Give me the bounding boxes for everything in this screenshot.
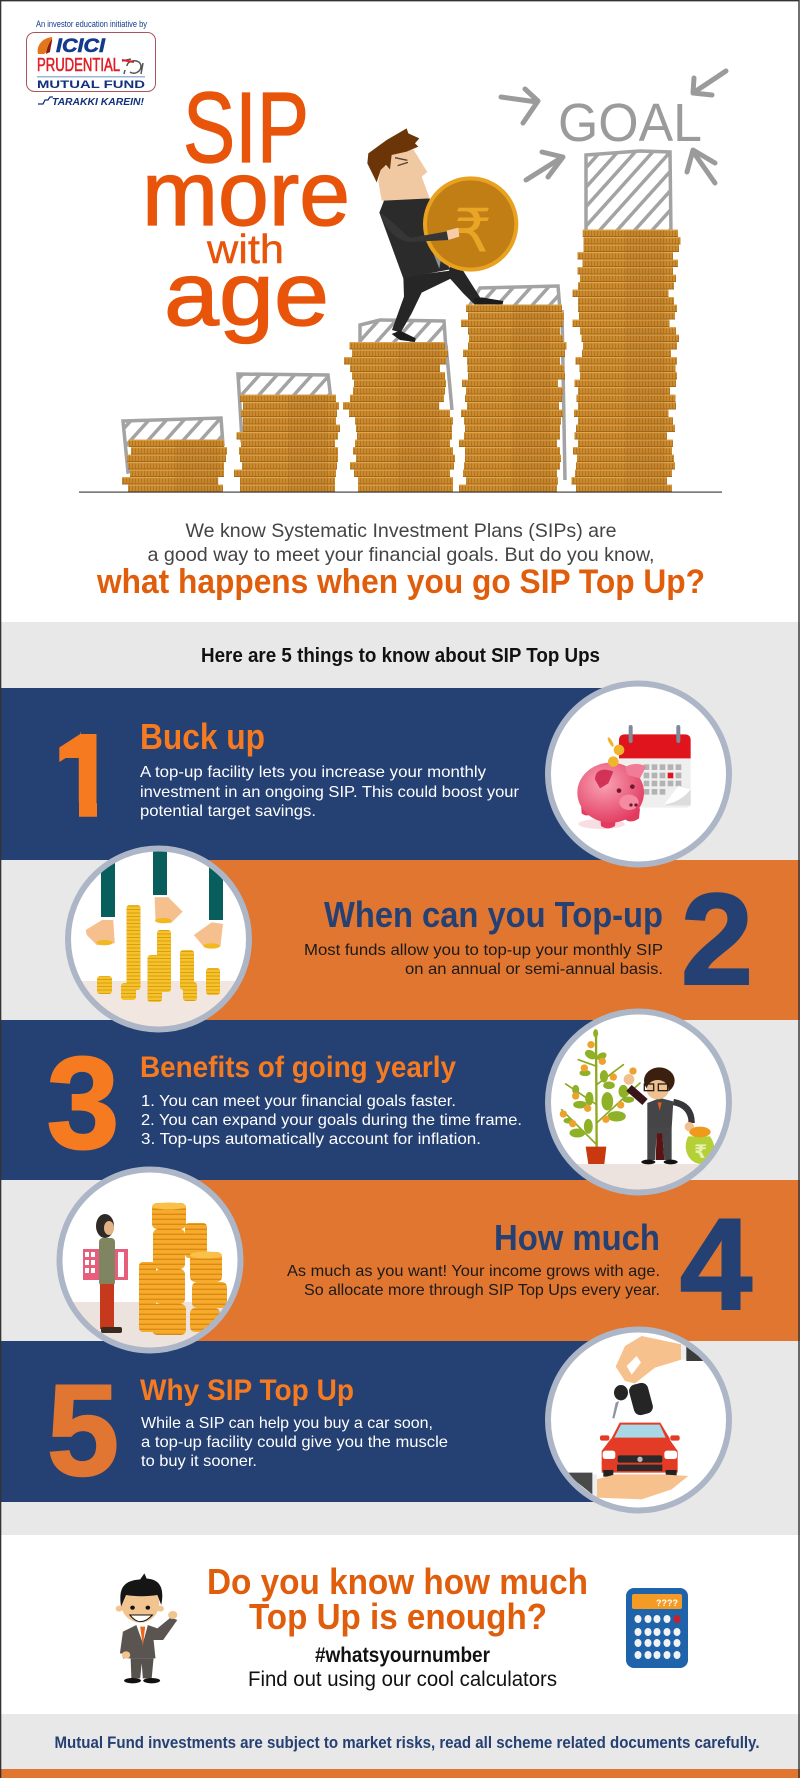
intro text: a good way to meet your financial goals. But do you know, xyxy=(148,544,654,566)
number 5: 5 xyxy=(47,1357,119,1503)
calendar xyxy=(619,734,691,808)
man xyxy=(99,1238,115,1286)
ground line xyxy=(79,492,722,493)
text: Find out using our cool calculators xyxy=(248,1668,557,1691)
panel: grey background xyxy=(0,622,800,1535)
body text: 1. You can meet your financial goals faster. xyxy=(141,1093,456,1110)
body text: potential target savings. xyxy=(140,803,316,820)
title: SIP more with age: age xyxy=(164,245,329,345)
panel: call to action: Top Up is enough? xyxy=(249,1596,547,1637)
body text: So allocate more through SIP Top Ups every year. xyxy=(304,1282,660,1299)
title: SIP more with age: more xyxy=(142,143,350,245)
number 2: 2 xyxy=(681,866,753,1012)
stack 5 xyxy=(572,230,680,492)
stack 4 xyxy=(459,304,566,492)
panel: item 1 Buck up xyxy=(0,688,640,860)
logo: ICICI Prudential Mutual Fund: PRUDENTIAL xyxy=(37,55,120,75)
logo: ICICI Prudential Mutual Fund: MUTUAL FUND xyxy=(37,79,145,91)
body text xyxy=(141,1093,522,1148)
jacket xyxy=(379,198,450,278)
illustration: businessman pushing rupee coin xyxy=(367,128,518,342)
number 4: 4 xyxy=(680,1191,752,1337)
man xyxy=(629,1088,645,1102)
coins xyxy=(608,756,619,767)
face xyxy=(378,149,429,204)
panel: item 3 Benefits of going yearly xyxy=(0,1020,640,1180)
stack 1 xyxy=(122,440,227,492)
logo: ICICI Prudential Mutual Fund xyxy=(26,19,156,108)
hatched outline boxes behind stacks xyxy=(123,151,671,472)
heading: Why SIP Top Up xyxy=(140,1374,354,1407)
heading: GOAL with arrows xyxy=(501,71,726,183)
body text: 2. You can expand your goals during the time frame. xyxy=(141,1112,522,1129)
icon circle 2: hands placing coin columns xyxy=(60,845,260,1031)
body text: As much as you want! Your income grows with age. xyxy=(287,1263,660,1280)
heading: Do you know how much xyxy=(207,1561,588,1602)
coin stacks xyxy=(185,1223,207,1258)
body text: Most funds allow you to top-up your monthly SIP xyxy=(304,942,663,959)
panel: item 4 How much xyxy=(150,1180,800,1341)
hair xyxy=(367,128,419,182)
intro text: We know Systematic Investment Plans (SIPs) are xyxy=(186,520,616,542)
title: SIP more with age xyxy=(142,72,350,345)
logo: ICICI Prudential Mutual Fund: ICICI xyxy=(56,36,106,57)
pot xyxy=(586,1147,606,1164)
body text: A top-up facility lets you increase your monthly xyxy=(140,764,486,781)
keys xyxy=(612,1401,619,1419)
stack 2 xyxy=(234,394,340,492)
heading: When can you Top-up xyxy=(324,894,663,935)
body text: to buy it sooner. xyxy=(141,1453,257,1470)
back leg and trousers xyxy=(392,269,462,333)
sleeves xyxy=(101,863,115,917)
icon circle 3: man with money tree: ₹ xyxy=(694,1142,707,1163)
lower hand xyxy=(597,1474,688,1499)
stack 3 xyxy=(343,342,455,492)
icon circle 4: man beside tall coin stacks xyxy=(50,1170,250,1362)
piggy bank xyxy=(578,819,625,829)
title: SIP more with age: with xyxy=(206,226,284,272)
intro text xyxy=(96,520,705,601)
logo: ICICI Prudential Mutual Fund: An investor education initiative by xyxy=(36,19,147,29)
subheading: Here are 5 things to know about SIP Top Ups xyxy=(201,645,600,667)
body text xyxy=(141,1415,448,1470)
intro text: what happens when you go SIP Top Up? xyxy=(96,563,705,601)
money bag xyxy=(686,1136,715,1164)
body text xyxy=(304,942,663,978)
body text: on an annual or semi-annual basis. xyxy=(405,961,663,978)
body text: a top-up facility could give you the muscle xyxy=(141,1434,448,1451)
coin xyxy=(423,176,518,272)
panel: disclaimer footer xyxy=(0,1714,800,1778)
icon circle 3: man with money tree xyxy=(545,1012,735,1201)
title: SIP more with age: SIP xyxy=(183,72,309,184)
number 3: 3 xyxy=(47,1029,119,1176)
arm and hand xyxy=(381,213,449,242)
plant xyxy=(562,1031,640,1146)
icon: calculator xyxy=(626,1588,688,1668)
icon: waving cartoon man xyxy=(116,1573,177,1683)
icon circle 1: piggy bank and calendar xyxy=(548,684,729,864)
heading: How much xyxy=(494,1217,660,1258)
car xyxy=(611,1423,670,1439)
hands xyxy=(86,897,223,949)
panel: item 2 When can you Top-up xyxy=(160,860,800,1020)
number 1: 1 xyxy=(52,710,118,842)
body text: While a SIP can help you buy a car soon, xyxy=(141,1415,433,1432)
body text xyxy=(140,764,520,820)
icon: calculator: ???? xyxy=(656,1598,678,1608)
body text: investment in an ongoing SIP. This could boost your xyxy=(140,784,520,801)
logo: ICICI Prudential Mutual Fund: TARAKKI KAREIN! xyxy=(52,97,145,108)
panel: item 5 Why SIP Top Up xyxy=(0,1341,640,1503)
body text xyxy=(287,1263,660,1299)
upper hand xyxy=(616,1336,682,1383)
hashtag: #whatsyournumber xyxy=(315,1644,490,1667)
panel: call to action xyxy=(116,1561,688,1691)
body text: 3. Top-ups automatically account for inflation. xyxy=(141,1131,481,1148)
illustration: businessman pushing rupee coin: ₹ xyxy=(454,197,492,267)
icon circle 5: hand giving car keys and car xyxy=(548,1330,729,1510)
heading: Buck up xyxy=(140,716,265,757)
coin columns xyxy=(126,905,140,990)
heading: GOAL with arrows: GOAL xyxy=(558,93,702,153)
chart: rising coin stacks with goal xyxy=(79,151,722,493)
backpack xyxy=(83,1249,128,1280)
heading: Benefits of going yearly xyxy=(140,1051,456,1084)
